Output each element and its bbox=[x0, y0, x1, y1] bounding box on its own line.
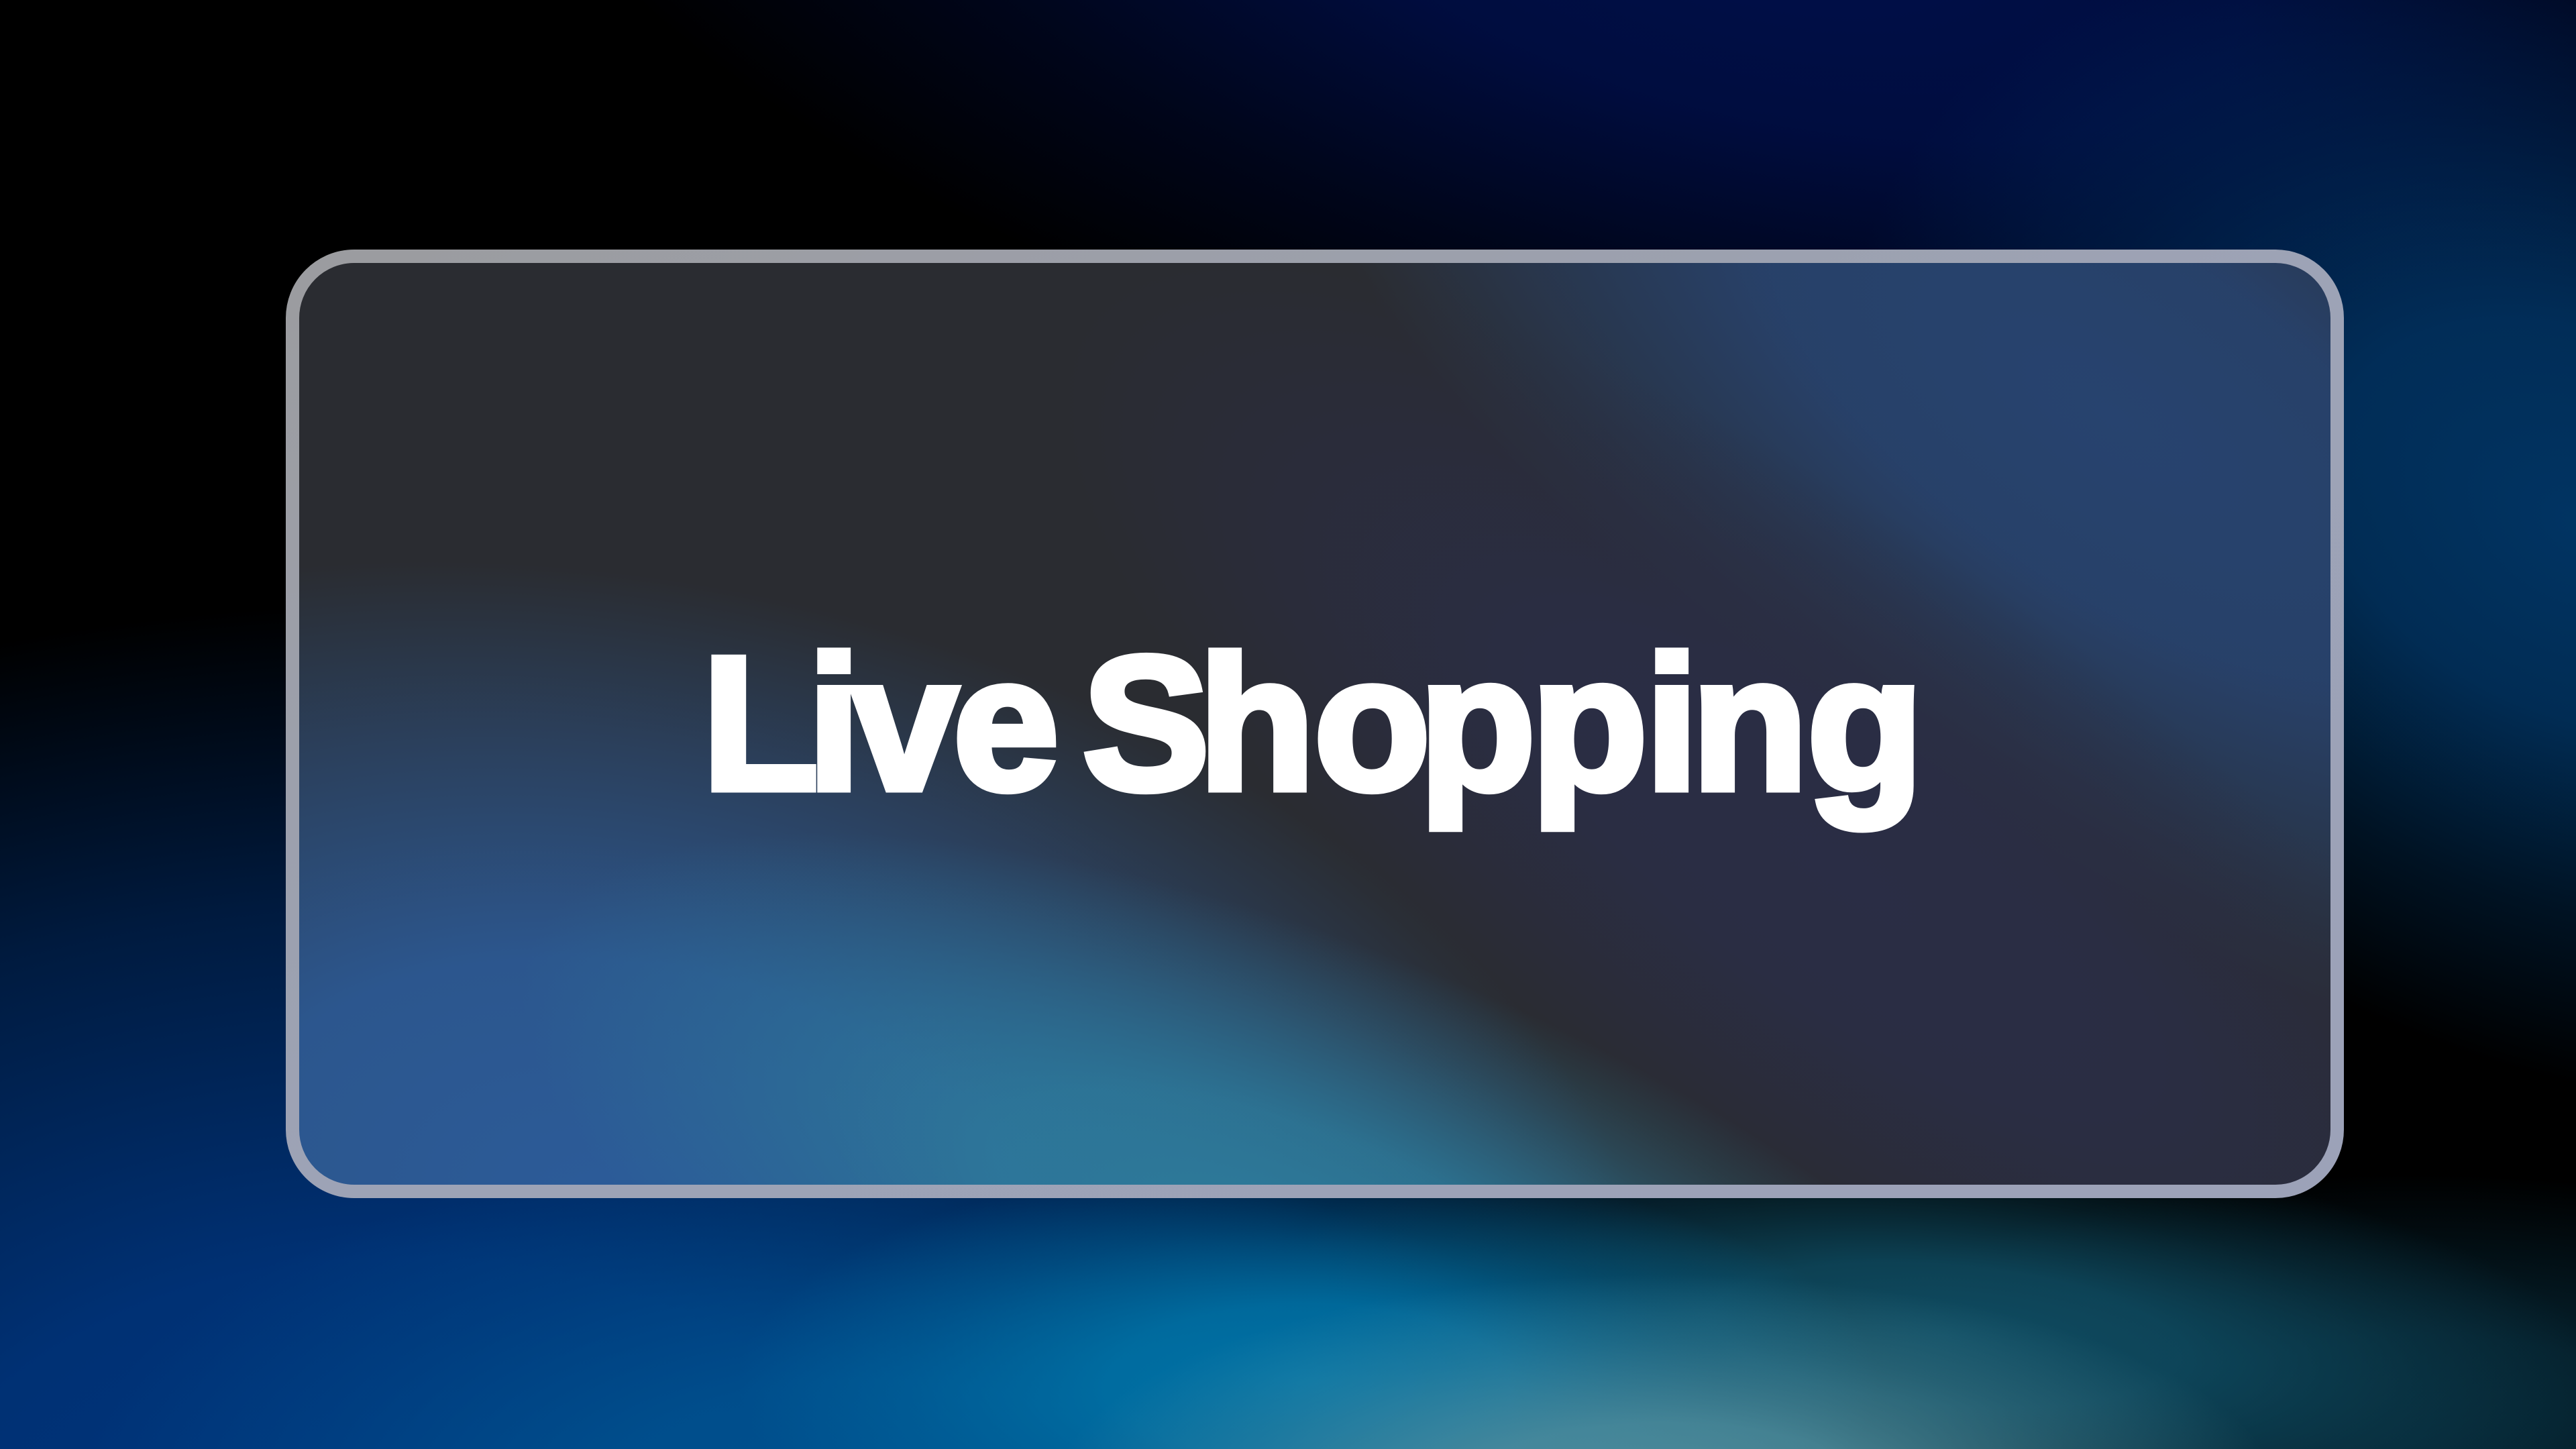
panel border bbox=[292, 256, 2337, 1191]
panel: glass card bbox=[292, 256, 2337, 1191]
title: Live Shopping bbox=[702, 617, 1923, 830]
